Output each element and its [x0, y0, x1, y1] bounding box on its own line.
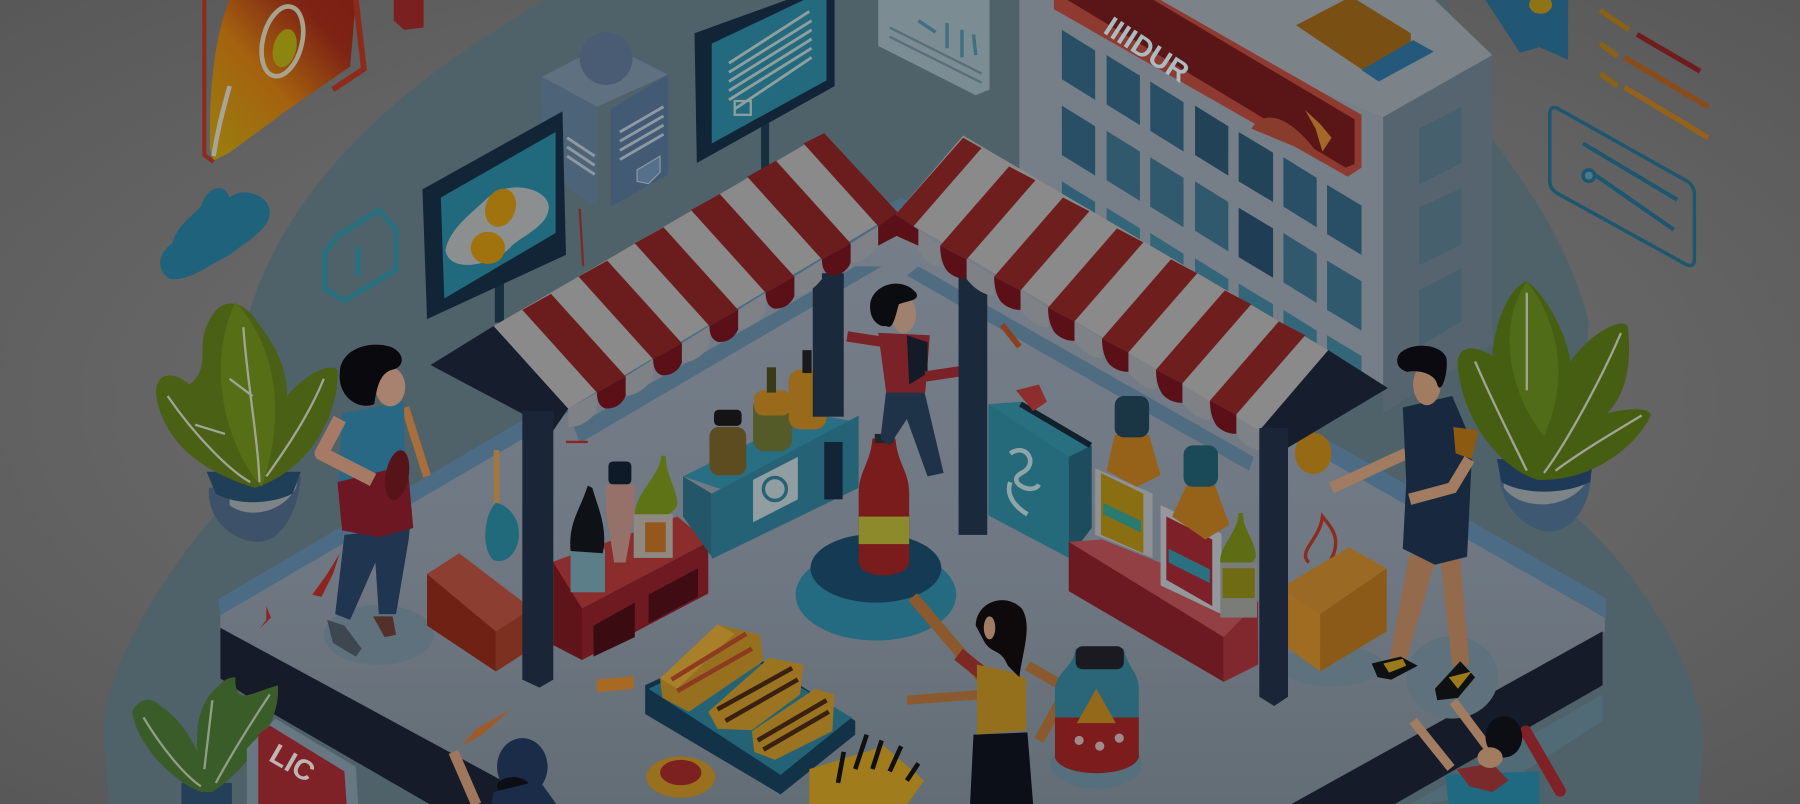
table bottles: [709, 350, 827, 475]
teal outline icon: [325, 210, 396, 301]
food tray: [645, 624, 855, 794]
building roof: [1096, 0, 1492, 117]
platform left side: [220, 628, 546, 804]
left awning gable: [430, 326, 568, 430]
LIC sign: [247, 719, 358, 804]
left awning band: [494, 133, 898, 409]
left plant: [156, 302, 338, 542]
left awning: [430, 133, 898, 430]
jar: [1050, 646, 1142, 789]
building front face: [1019, 0, 1383, 390]
left woman: [321, 345, 427, 657]
center man: [847, 284, 982, 476]
teal table: [683, 413, 859, 559]
white lips: [918, 230, 1259, 450]
teal case: [988, 385, 1092, 558]
LIC sign: LIC: [264, 738, 320, 789]
red drops: [597, 212, 898, 409]
left front post: [522, 411, 553, 688]
right front post: [1259, 428, 1288, 706]
right plant: [1458, 281, 1651, 531]
floor: [220, 218, 1605, 804]
cake group two: [708, 658, 804, 730]
monitor with text: [695, 0, 835, 169]
cake group three: [752, 689, 835, 760]
pear bottle: [1220, 513, 1257, 618]
bottom-left plant: [132, 677, 278, 804]
hanging orange fruit: [1295, 433, 1332, 474]
outline note card: [1550, 107, 1694, 266]
bottle two: [1161, 445, 1229, 614]
red drops: [895, 215, 1236, 434]
teal vase: [485, 450, 519, 561]
confetti: [259, 209, 1019, 746]
right bottles: [1095, 396, 1257, 618]
red stripes: [895, 138, 1305, 414]
red stripes: [522, 133, 898, 393]
right awning: [895, 135, 1388, 450]
cake group one: [660, 624, 763, 712]
red crate: [427, 553, 532, 672]
building: [1019, 0, 1492, 413]
orange box with handle: [1281, 517, 1387, 672]
platform right side: [1290, 631, 1603, 804]
building side face: [1383, 55, 1492, 413]
bottle one: [1095, 396, 1161, 558]
windows: [1062, 30, 1361, 405]
right red base: [1069, 540, 1258, 682]
right woman: [1332, 346, 1479, 700]
left post rear: [813, 273, 844, 417]
bottom woman: [907, 597, 1068, 804]
side windows: [1419, 107, 1461, 347]
monitor with eggs: [422, 111, 566, 323]
shelf bottles: [570, 456, 677, 592]
banner: [1054, 0, 1361, 177]
right awning band: [895, 135, 1328, 430]
floor shadows: [324, 605, 1498, 719]
server tower: [542, 32, 668, 207]
cloud icon: [160, 188, 270, 279]
ribbon icon: [1485, 0, 1568, 60]
rail under left awning: [574, 266, 882, 443]
dashes list: [1600, 10, 1708, 138]
right awning gable: [1259, 350, 1388, 448]
banner text: IIIIDUR: [1098, 11, 1195, 89]
platform right shadow: [1410, 694, 1603, 804]
back rails: [218, 197, 1606, 618]
meat dish: [646, 756, 715, 798]
bottom-right person: [1413, 701, 1560, 804]
flame leaf icon: [204, 0, 364, 162]
right awning rear post: [959, 275, 987, 535]
small red tag: [394, 0, 424, 30]
white lips: [568, 226, 878, 427]
rail under right awning: [907, 266, 1254, 471]
red shelf: [551, 517, 708, 660]
center plinth: [796, 534, 956, 641]
stick box: [809, 735, 924, 804]
bottom-left person: [453, 738, 557, 804]
small sign card: [878, 0, 990, 95]
roof card: [1296, 0, 1434, 82]
red bottle: [859, 434, 909, 575]
